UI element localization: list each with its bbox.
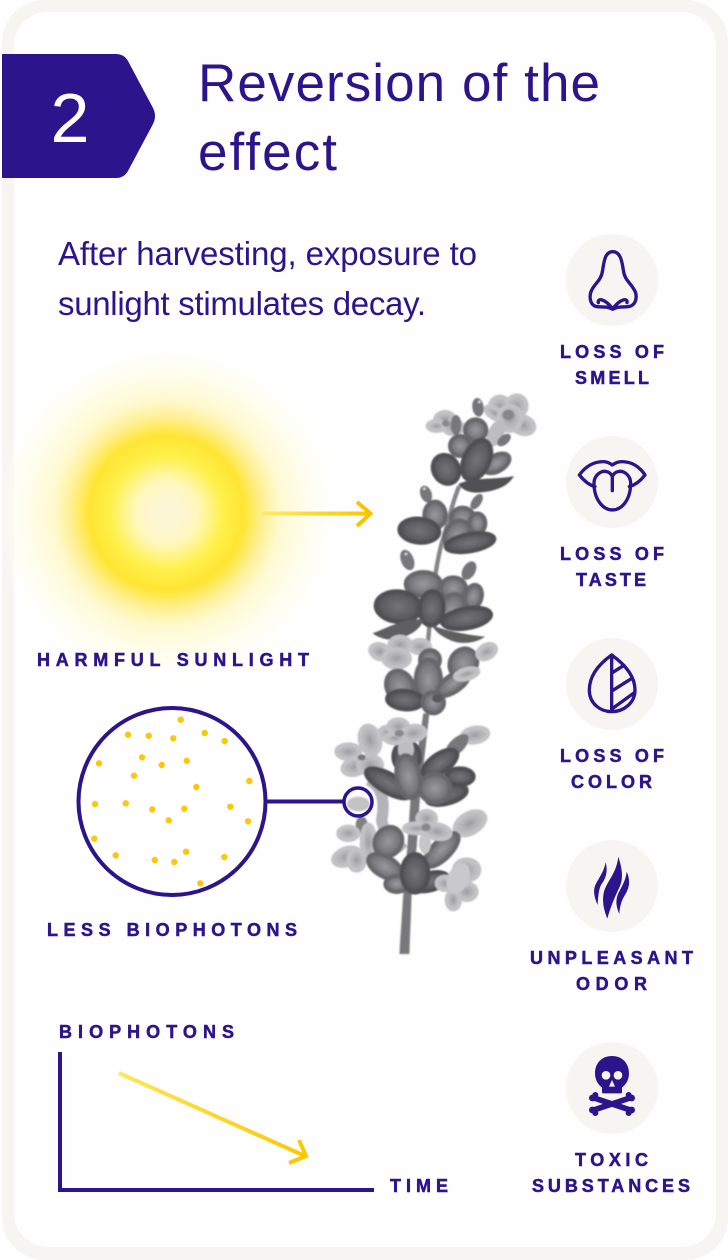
line chart (59, 1022, 448, 1196)
flower lower half (331, 637, 499, 954)
arrow: sunlight to flower (262, 502, 370, 526)
icon: nose (590, 252, 636, 309)
effect: loss of taste (560, 436, 664, 590)
label: harmful sunlight: HARMFUL SUNLIGHT (37, 650, 309, 670)
effect: toxic substances (532, 1042, 690, 1196)
x axis label: TIME (390, 1176, 448, 1196)
zoom circle with biophoton dots (78, 708, 266, 895)
connector to flower detail (267, 788, 372, 816)
number badge (2, 54, 155, 178)
effect: loss of color: LOSS OF (560, 746, 664, 766)
effect: loss of smell: SMELL (575, 368, 649, 388)
biophoton dots (91, 716, 252, 886)
effect: unpleasant odor: UNPLEASANT (530, 948, 693, 968)
flower upper half (373, 395, 537, 650)
effect: loss of color: COLOR (571, 772, 652, 792)
intro text: sunlight stimulates decay. (58, 285, 426, 322)
icon: leaf (589, 655, 635, 712)
y axis label: BIOPHOTONS (59, 1022, 234, 1042)
icon: odor waves (594, 857, 629, 919)
effect: toxic substances: TOXIC (575, 1150, 648, 1170)
sun glow (0, 341, 338, 685)
effect: loss of smell (560, 234, 664, 388)
icon: skull and crossbones (589, 1056, 635, 1116)
effect: loss of taste: LOSS OF (560, 544, 664, 564)
badge number: 2 (51, 79, 89, 157)
effect: loss of taste: TASTE (576, 570, 646, 590)
effect: loss of color (560, 638, 664, 792)
effect: unpleasant odor (530, 840, 693, 994)
icon: tongue (579, 462, 645, 510)
effect: unpleasant odor: ODOR (576, 974, 647, 994)
effect: loss of smell: LOSS OF (560, 342, 664, 362)
effect: toxic substances: SUBSTANCES (532, 1176, 690, 1196)
title: effect (198, 123, 337, 182)
declining arrow (119, 1073, 306, 1163)
label: less biophotons: LESS BIOPHOTONS (47, 920, 297, 940)
title: Reversion of the (198, 54, 600, 113)
chart axes (60, 1052, 374, 1190)
flower illustration (331, 395, 537, 954)
intro text (58, 235, 477, 322)
intro text: After harvesting, exposure to (58, 235, 477, 272)
title (198, 54, 600, 182)
